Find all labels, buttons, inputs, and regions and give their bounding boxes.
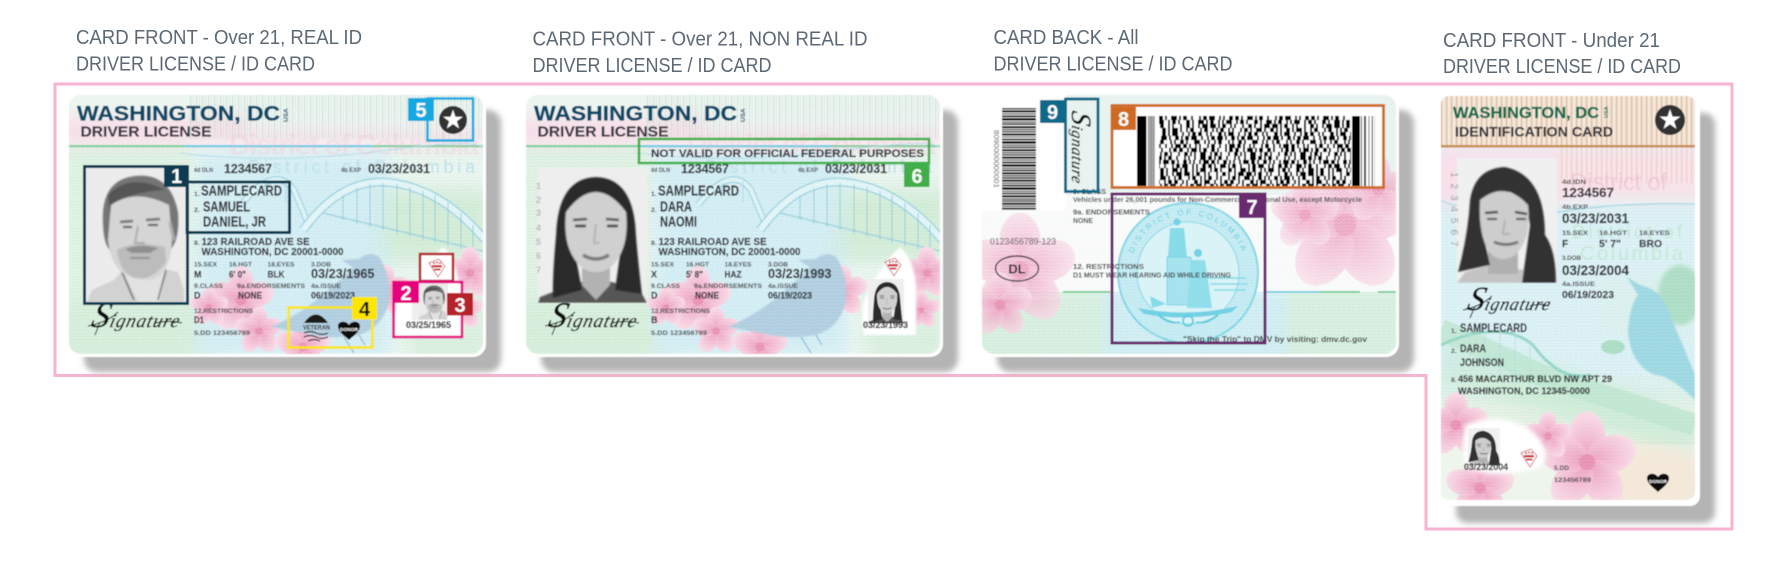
pink outline grouping the cards xyxy=(55,84,1732,529)
callout 6: not valid for official federal purposes: NOT VALID FOR OFFICIAL FEDERAL PURPOSES xyxy=(651,148,924,160)
panel: card front over 21 real id: BLK xyxy=(268,270,285,280)
panel: card front over 21 non real id: NONE xyxy=(695,290,719,300)
panel: card front over 21 real id: DRIVER LICENSE xyxy=(80,124,212,140)
panel: card front over 21 non real id: 12.RESTRICTIONS xyxy=(651,308,710,315)
panel: card front over 21 non real id: 4a.ISSUE xyxy=(768,283,798,290)
heading: card front over 21 non real id: DRIVER LICENSE / ID CARD xyxy=(532,54,772,77)
seal of the District: DISTRICT OF COLUMBIA xyxy=(1128,208,1246,254)
signature: Signature xyxy=(545,295,644,335)
callout 6: not valid for official federal purposes xyxy=(639,139,930,188)
panel: card front over 21 real id: 16.HGT xyxy=(229,262,253,268)
card back text xyxy=(990,189,1368,344)
photo: woman xyxy=(1457,158,1557,283)
barcode: 1D linear: 8090000000001 xyxy=(992,130,999,188)
card back text: Vehicles under 26,001 pounds for Non-Commercial, Personal Use, except Motorcycle xyxy=(1073,197,1362,204)
panel: card front under 21: 1234567 xyxy=(1448,172,1459,248)
callout 2 and 3: ghost portrait and red flag mark: 2 xyxy=(400,283,412,305)
panel: card front over 21 real id: 3.DOB xyxy=(311,262,331,268)
panel: card front under 21: 16.HGT xyxy=(1599,230,1628,237)
panel: card front over 21 non real id: 5.DD 123456789 xyxy=(651,330,707,337)
panel: card front over 21 real id: SAMPLECARD xyxy=(201,182,282,200)
panel: card front over 21 real id: 8. xyxy=(194,240,200,247)
panel: card front over 21 non real id: 2. xyxy=(651,207,657,214)
callout 6: not valid for official federal purposes: 6 xyxy=(911,166,923,188)
panel: card front under 21: 1234567 xyxy=(1562,185,1614,200)
panel: card front over 21 non real id: 5 xyxy=(536,237,541,247)
panel: card front over 21 non real id: 8. xyxy=(651,240,657,247)
callout 2 and 3: ghost portrait and red flag mark: 03/25/1965 xyxy=(406,320,451,330)
panel: card front over 21 real id: 03/23/1965 xyxy=(311,266,374,281)
signature: Signature xyxy=(1464,280,1557,318)
panel: card front under 21 xyxy=(1421,96,1720,524)
barcode: PDF417 xyxy=(1113,107,1383,187)
panel: card front over 21 non real id: D xyxy=(651,290,658,300)
panel: card front under 21: 03/23/2004 xyxy=(1562,262,1629,278)
panel: card front under 21: JOHNSON xyxy=(1460,357,1504,369)
panel: card front over 21 non real id: 03/23/1993 xyxy=(768,266,832,281)
panel: card front over 21 real id: 18.EYES xyxy=(268,262,295,268)
card back text: 12. RESTRICTIONS xyxy=(1073,264,1144,271)
panel: card front over 21 real id: 12.RESTRICTIONS xyxy=(194,308,253,315)
panel: card front over 21 real id: USA xyxy=(283,108,290,122)
panel: card front over 21 non real id: 2 xyxy=(536,195,541,205)
panel: card front over 21 real id: 06/19/2023 xyxy=(311,290,355,300)
panel: card front over 21 real id: 4d DLN xyxy=(194,167,213,174)
heading: card front over 21 real id xyxy=(76,26,362,76)
panel: card front under 21: 18.EYES xyxy=(1639,230,1671,237)
panel: card front over 21 non real id: 1 xyxy=(536,181,541,191)
panel: card front over 21 real id: D1 xyxy=(194,315,204,325)
panel: card front over 21 non real id: 123 RAILROAD AVE SE xyxy=(658,237,767,248)
callout 8: barcode frame xyxy=(1111,106,1384,188)
signature: Signature xyxy=(88,295,187,335)
panel: card front over 21 real id: 4b EXP xyxy=(341,167,361,174)
panel: card front over 21 real id: 5.DD 123456789 xyxy=(194,330,250,337)
panel: card front over 21 non real id: 4 xyxy=(536,223,541,233)
panel: card front over 21 non real id: X xyxy=(651,270,657,280)
panel: card front under 21: 03/23/2031 xyxy=(1562,210,1629,226)
panel: card front over 21 non real id: 1. xyxy=(651,191,657,198)
panel: card front under 21: 06/19/2023 xyxy=(1562,290,1614,301)
callout 1: portrait and name frame: 1 xyxy=(171,166,182,188)
panel: card front under 21: 3.DOB xyxy=(1562,255,1581,262)
panel: card front over 21 non real id: 9a.ENDORSEMENTS xyxy=(694,283,762,290)
panel: card front over 21 real id: District of Columbia xyxy=(248,157,476,177)
heading: card back all: CARD BACK - All xyxy=(994,26,1138,49)
panel: card front under 21: 4a.ISSUE xyxy=(1562,281,1596,288)
callout 7: seal frame: 7 xyxy=(1246,197,1258,219)
callout 5: star marker: 5 xyxy=(415,100,427,122)
callout 4: veteran and donor markers xyxy=(288,297,377,348)
panel: card front under 21: 4b.EXP xyxy=(1562,204,1589,211)
callout 4: veteran and donor markers: DONOR xyxy=(340,327,359,332)
panel: card front under 21: F xyxy=(1562,239,1568,250)
panel: card front over 21 non real id: 3 xyxy=(536,208,541,218)
DL oval xyxy=(996,256,1038,281)
panel: card front over 21 real id: 6' 0" xyxy=(229,270,246,280)
icon: donor heart: DONOR xyxy=(1649,479,1668,484)
panel: card front under 21: DARA xyxy=(1460,343,1486,355)
panel: card front over 21 non real id: WASHINGTON, DC xyxy=(534,102,737,126)
panel: card front over 21 non real id: 03/23/2031 xyxy=(825,161,887,176)
icon: star marker xyxy=(1655,105,1685,135)
panel: card front over 21 real id: 1234567 xyxy=(224,161,272,176)
heading: card front over 21 non real id: CARD FRONT - Over 21, NON REAL ID xyxy=(532,28,868,50)
callout 9: signature xyxy=(1040,99,1098,192)
panel: card front over 21 non real id: 06/19/2023 xyxy=(768,290,812,300)
card back text: 9a. ENDORSEMENTS xyxy=(1073,210,1150,216)
callout 4: veteran and donor markers: 4 xyxy=(359,299,371,321)
panel: card front over 21 non real id: DARA xyxy=(660,200,692,216)
panel: card front over 21 non real id: B xyxy=(651,315,658,325)
panel: card front under 21: 123456789 xyxy=(1554,477,1591,484)
panel: card front over 21 real id: 4a.ISSUE xyxy=(311,283,341,290)
heading: card back all: DRIVER LICENSE / ID CARD xyxy=(994,52,1232,76)
panel: card front over 21 non real id: DRIVER LICENSE xyxy=(538,124,668,140)
card back text: D1 MUST WEAR HEARING AID WHILE DRIVING xyxy=(1073,272,1232,280)
panel: card front under 21: 5.DD xyxy=(1554,465,1569,472)
panel: card front over 21 non real id: 4d DLN xyxy=(651,167,670,174)
DL oval: DL xyxy=(1008,262,1026,276)
callout 9: signature: Signature xyxy=(1065,109,1096,187)
panel: card front over 21 non real id: 6 xyxy=(536,251,541,261)
panel: card front under 21: District of xyxy=(1570,169,1667,196)
barcode: 1D linear xyxy=(992,108,1019,210)
callout 2 and 3: ghost portrait and red flag mark: 3 xyxy=(454,295,466,317)
card back text: 9. CLASS xyxy=(1073,189,1106,196)
panel: card front under 21: IDENTIFICATION CARD xyxy=(1455,124,1613,140)
panel: card front over 21 non real id: HAZ xyxy=(724,270,742,280)
ghost portrait and flag mark: 03/23/2004 xyxy=(1464,462,1508,472)
panel: card front over 21 real id: WASHINGTON, DC 20001-0000 xyxy=(202,247,344,258)
panel: card front over 21 real id xyxy=(57,83,501,376)
panel: card front over 21 real id: 123 RAILROAD AVE SE xyxy=(202,237,310,248)
panel: card front over 21 real id: M xyxy=(194,270,202,280)
heading: card front under 21: DRIVER LICENSE / ID CARD xyxy=(1443,55,1681,78)
heading: card front over 21 real id: DRIVER LICENSE / ID CARD xyxy=(76,52,315,76)
panel: card front under 21: 456 MACARTHUR BLVD NW APT 29 xyxy=(1458,374,1612,384)
panel: card front over 21 real id: WASHINGTON, DC xyxy=(77,102,280,126)
callout 9: signature: 9 xyxy=(1047,102,1058,124)
panel: card front over 21 non real id: 3.DOB xyxy=(768,262,788,268)
heading: card front over 21 real id: CARD FRONT - Over 21, REAL ID xyxy=(76,26,362,49)
panel: card front under 21: 5' 7" xyxy=(1599,239,1621,250)
seal of the District xyxy=(1116,201,1260,342)
panel: card front under 21: 4d.IDN xyxy=(1562,179,1586,186)
ghost portrait and flag mark xyxy=(863,258,908,330)
callout 5: star marker xyxy=(408,98,473,140)
heading: card front under 21 xyxy=(1443,29,1681,78)
callout 4: veteran and donor markers: VETERAN xyxy=(303,326,330,332)
heading: card back all xyxy=(994,26,1232,76)
callout 2 and 3: ghost portrait and red flag mark xyxy=(393,254,473,337)
panel: card front over 21 non real id: 5' 8" xyxy=(686,270,703,280)
panel: card front under 21: WASHINGTON, DC 12345-0000 xyxy=(1458,386,1590,396)
icon: donor heart xyxy=(1647,474,1669,492)
panel: card front over 21 real id: DANIEL, JR xyxy=(203,214,266,230)
panel: card front over 21 non real id xyxy=(514,83,958,376)
panel: card front over 21 real id: 9a.ENDORSEMENTS xyxy=(237,283,305,290)
callout 1: portrait and name frame xyxy=(84,165,290,304)
panel: card front over 21 non real id: 7 xyxy=(536,265,541,275)
panel: card front over 21 non real id: WASHINGTON, DC 20001-0000 xyxy=(658,247,801,258)
panel: card front over 21 real id: SAMUEL xyxy=(203,200,250,216)
panel: card front over 21 non real id: 4b EXP xyxy=(798,167,818,174)
panel: card front under 21: Columbia xyxy=(1580,243,1684,265)
panel: card front over 21 non real id: 1234567 xyxy=(681,161,729,176)
ghost portrait and flag mark xyxy=(1464,428,1537,472)
panel: card front over 21 real id: 9.CLASS xyxy=(194,283,223,290)
panel: card front under 21: District of xyxy=(1572,222,1683,242)
panel: card front under 21: 2. xyxy=(1451,348,1457,355)
panel: card front over 21 real id: 2. xyxy=(194,207,200,214)
heading: card front under 21: CARD FRONT - Under 21 xyxy=(1443,29,1660,52)
panel: card front over 21 non real id: SAMPLECARD xyxy=(658,182,739,200)
card back text: NONE xyxy=(1073,218,1093,225)
panel: card front over 21 non real id: 16.HGT xyxy=(686,262,710,268)
panel: card front under 21: SAMPLECARD xyxy=(1460,323,1527,335)
panel: card back xyxy=(982,94,1418,376)
panel: card front under 21: 8. xyxy=(1451,377,1457,384)
panel: card front under 21: USA xyxy=(1604,106,1610,118)
photo: man xyxy=(85,167,186,302)
panel: card front over 21 real id: 1. xyxy=(194,191,200,198)
panel: card front over 21 non real id: USA xyxy=(740,108,747,122)
card back text: 0123456789-123 xyxy=(990,236,1056,246)
ghost portrait and flag mark: 03/23/1993 xyxy=(863,320,908,330)
heading: card front over 21 non real id xyxy=(532,28,868,77)
photo: woman xyxy=(538,168,647,303)
panel: card front under 21: WASHINGTON, DC xyxy=(1453,105,1599,122)
callout 8: barcode frame: 8 xyxy=(1118,109,1129,131)
panel: card front under 21: 1. xyxy=(1451,328,1457,335)
panel: card front over 21 non real id: 15.SEX xyxy=(651,262,674,268)
panel: card front over 21 real id: 03/23/2031 xyxy=(368,161,430,176)
panel: card front over 21 non real id: 18.EYES xyxy=(724,262,752,268)
panel: card front over 21 non real id: 9.CLASS xyxy=(651,283,680,290)
panel: card front over 21 real id: D xyxy=(194,290,201,300)
panel: card front over 21 non real id: NAOMI xyxy=(660,214,697,230)
panel: card front over 21 real id: 15.SEX xyxy=(194,262,217,268)
panel: card front under 21: 15.SEX xyxy=(1562,230,1589,237)
panel: card front over 21 non real id: District of Columbia xyxy=(705,157,933,177)
panel: card front under 21: BRO xyxy=(1639,239,1662,250)
card back text: "Skip the Trip" to DMV by visiting: dmv.dc.gov xyxy=(1183,335,1368,344)
callout 7: seal frame xyxy=(1112,194,1265,343)
panel: card front over 21 real id: NONE xyxy=(238,290,262,300)
